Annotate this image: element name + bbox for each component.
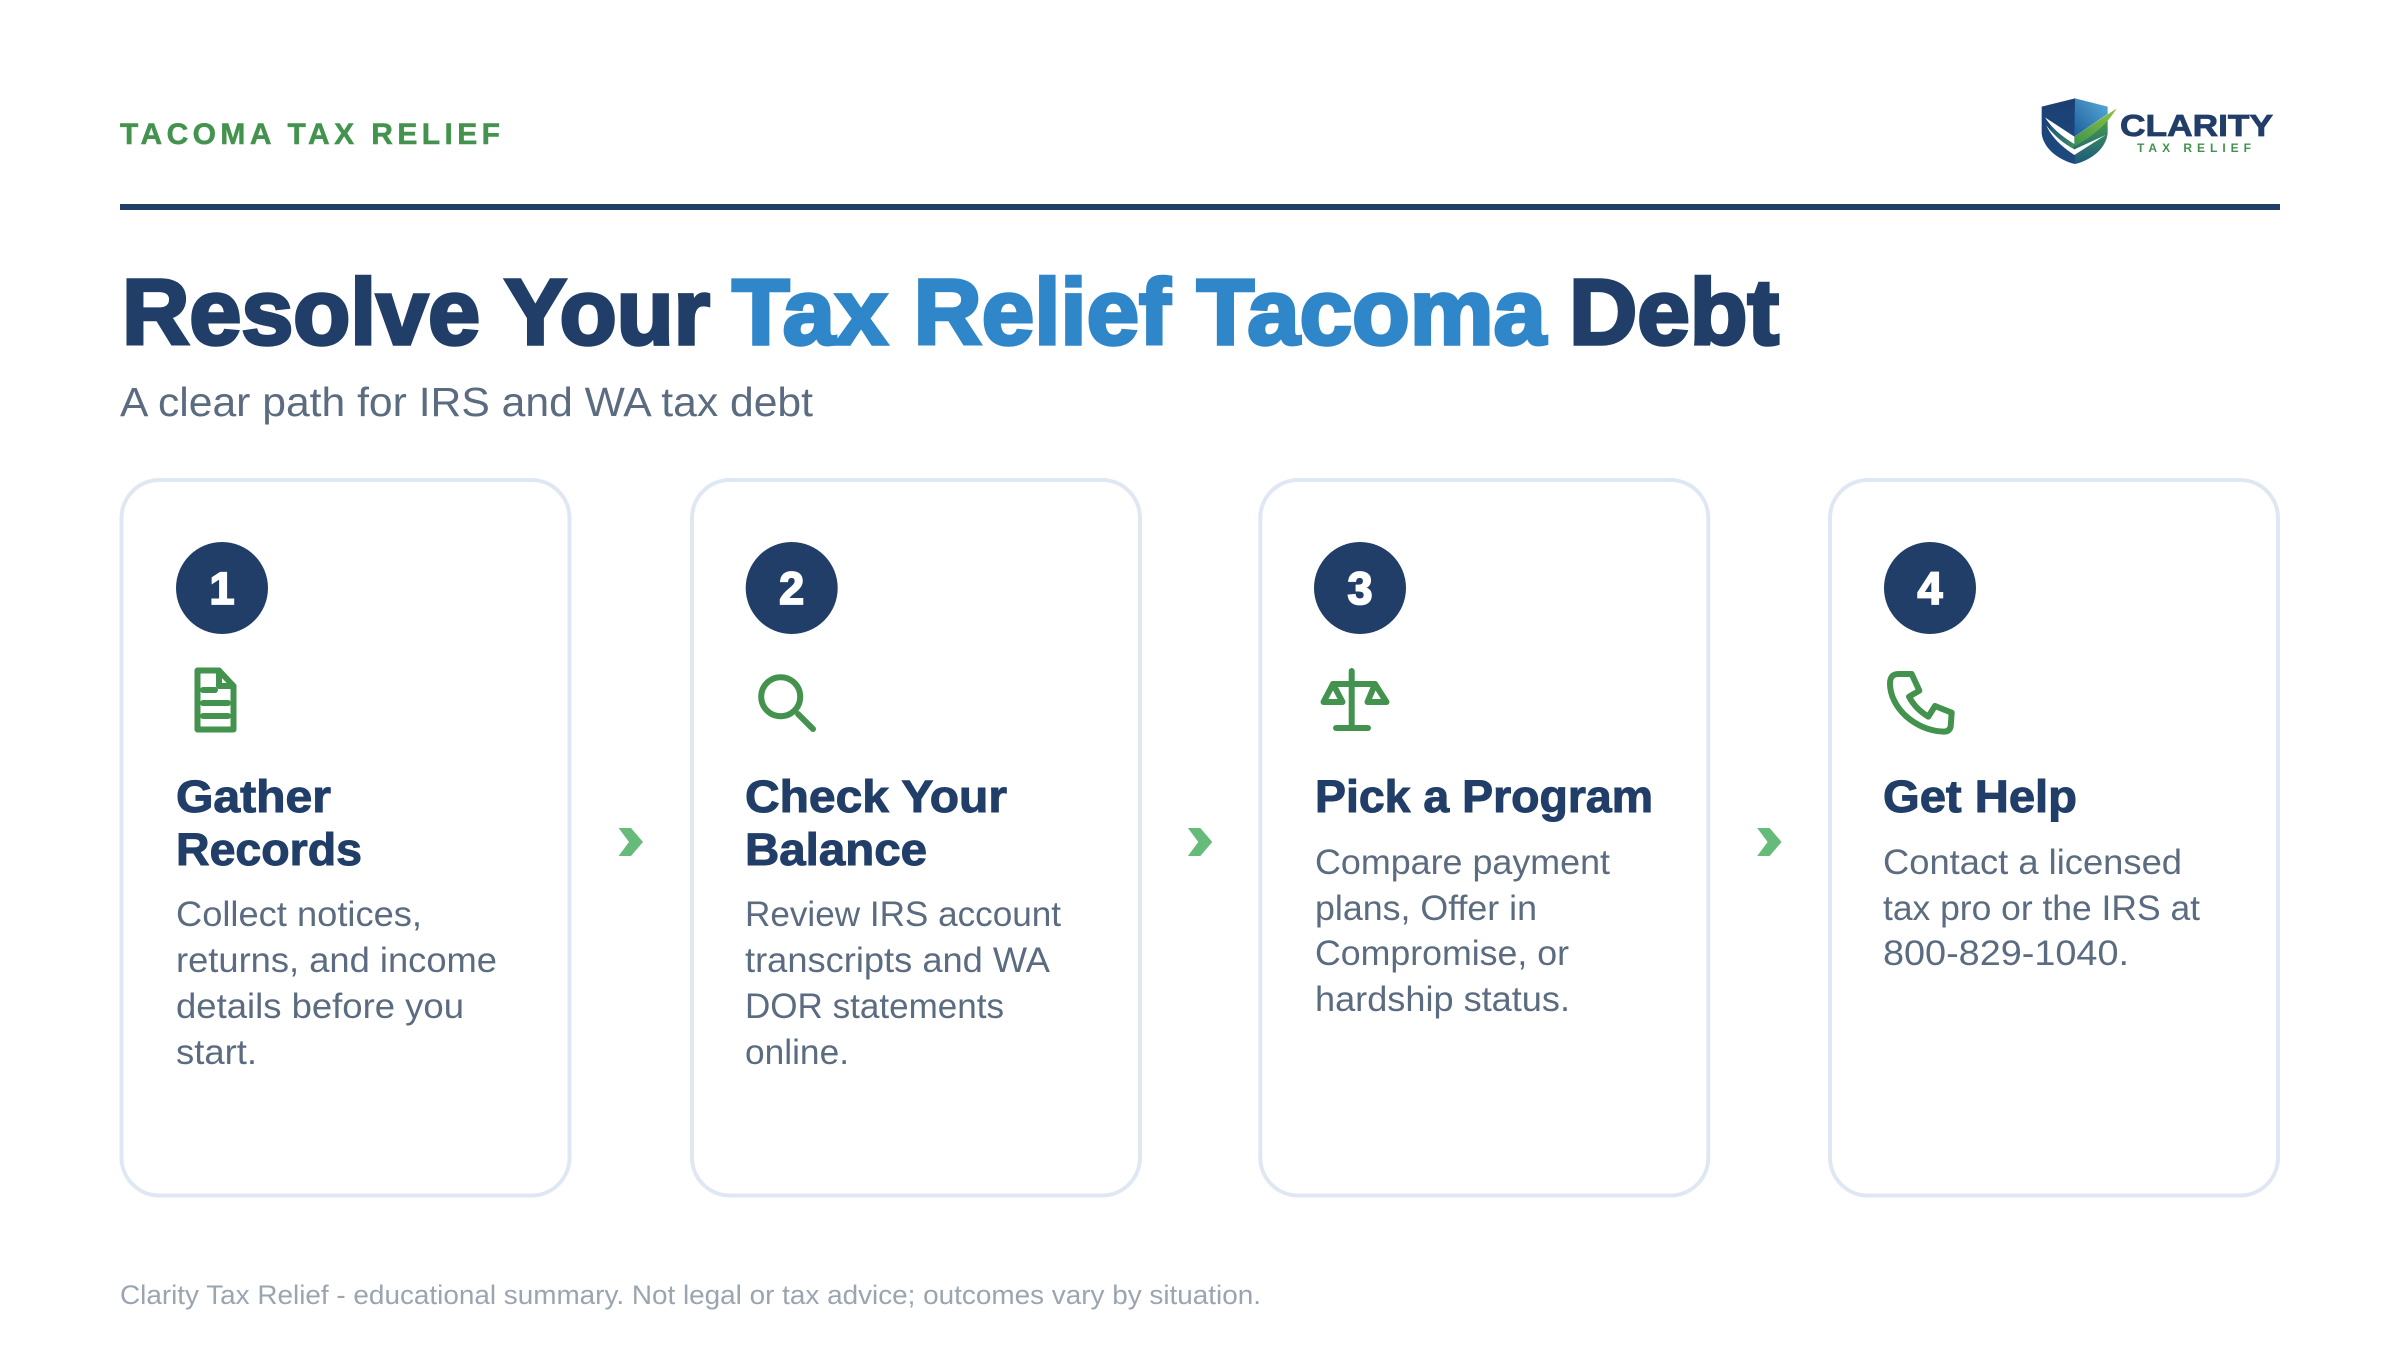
heading: Gather <box>176 771 331 822</box>
step number 4: 4 <box>1917 563 1943 614</box>
icon: balance scale <box>1324 671 1386 728</box>
description: Contact a licensed <box>1883 843 2182 882</box>
heading: Get Help <box>1883 771 2077 822</box>
title: Tax Relief Tacoma <box>732 260 1547 364</box>
description <box>1315 843 1610 1019</box>
icon: document <box>198 670 234 730</box>
description: DOR statements <box>745 987 1004 1026</box>
description <box>1883 843 2200 973</box>
heading: Balance <box>745 824 927 875</box>
arrow 1 <box>619 828 643 856</box>
heading <box>745 771 1007 875</box>
heading <box>176 771 362 875</box>
icon: magnifier <box>761 677 813 729</box>
card border <box>1830 480 2278 1196</box>
heading: Pick a Program <box>1315 771 1653 822</box>
arrow 2 <box>1188 828 1212 856</box>
description: returns, and income <box>176 941 497 980</box>
title <box>122 260 1779 364</box>
description: 800-829-1040. <box>1883 934 2129 973</box>
logo tagline: TAX RELIEF <box>2137 141 2251 155</box>
description: start. <box>176 1033 257 1072</box>
step number 2: 2 <box>779 563 804 614</box>
description <box>176 895 497 1072</box>
step number 3 <box>1314 542 1406 634</box>
icon: phone <box>1890 674 1952 732</box>
step number 2 <box>746 542 838 634</box>
description: hardship status. <box>1315 980 1570 1019</box>
description: Review IRS account <box>745 895 1061 934</box>
panel: step 3 pick a program <box>1260 480 1708 1196</box>
description: Compare payment <box>1315 843 1610 882</box>
description: details before you <box>176 987 464 1026</box>
logo wordmark: CLARITY <box>2120 108 2273 143</box>
card border <box>1260 480 1708 1196</box>
step number 1 <box>176 542 268 634</box>
description <box>745 895 1061 1072</box>
logo shield <box>2042 98 2117 164</box>
description: tax pro or the IRS at <box>1883 889 2200 928</box>
card border <box>692 480 1140 1196</box>
description: Compromise, or <box>1315 934 1569 973</box>
step number 1: 1 <box>209 563 235 614</box>
panel: step 1 gather records <box>122 480 570 1196</box>
description: plans, Offer in <box>1315 889 1537 928</box>
title: Debt <box>1569 260 1779 364</box>
description: transcripts and WA <box>745 941 1051 980</box>
panel: step 2 check your balance <box>692 480 1140 1196</box>
step number 3: 3 <box>1347 563 1373 614</box>
subtitle: A clear path for IRS and WA tax debt <box>120 379 814 425</box>
description: online. <box>745 1033 849 1072</box>
footer disclaimer: Clarity Tax Relief - educational summary. Not legal or tax advice; outcomes vary by situation. <box>120 1280 1261 1310</box>
logo <box>2042 98 2273 164</box>
card border <box>122 480 570 1196</box>
step number 4 <box>1884 542 1976 634</box>
description: Collect notices, <box>176 895 422 934</box>
heading: Check Your <box>745 771 1007 822</box>
header label: TACOMA TAX RELIEF <box>120 118 500 151</box>
panel: step 4 get help <box>1830 480 2278 1196</box>
title: Resolve Your <box>122 260 710 364</box>
arrow 3 <box>1757 828 1782 856</box>
header rule <box>120 204 2280 210</box>
heading: Records <box>176 824 362 875</box>
